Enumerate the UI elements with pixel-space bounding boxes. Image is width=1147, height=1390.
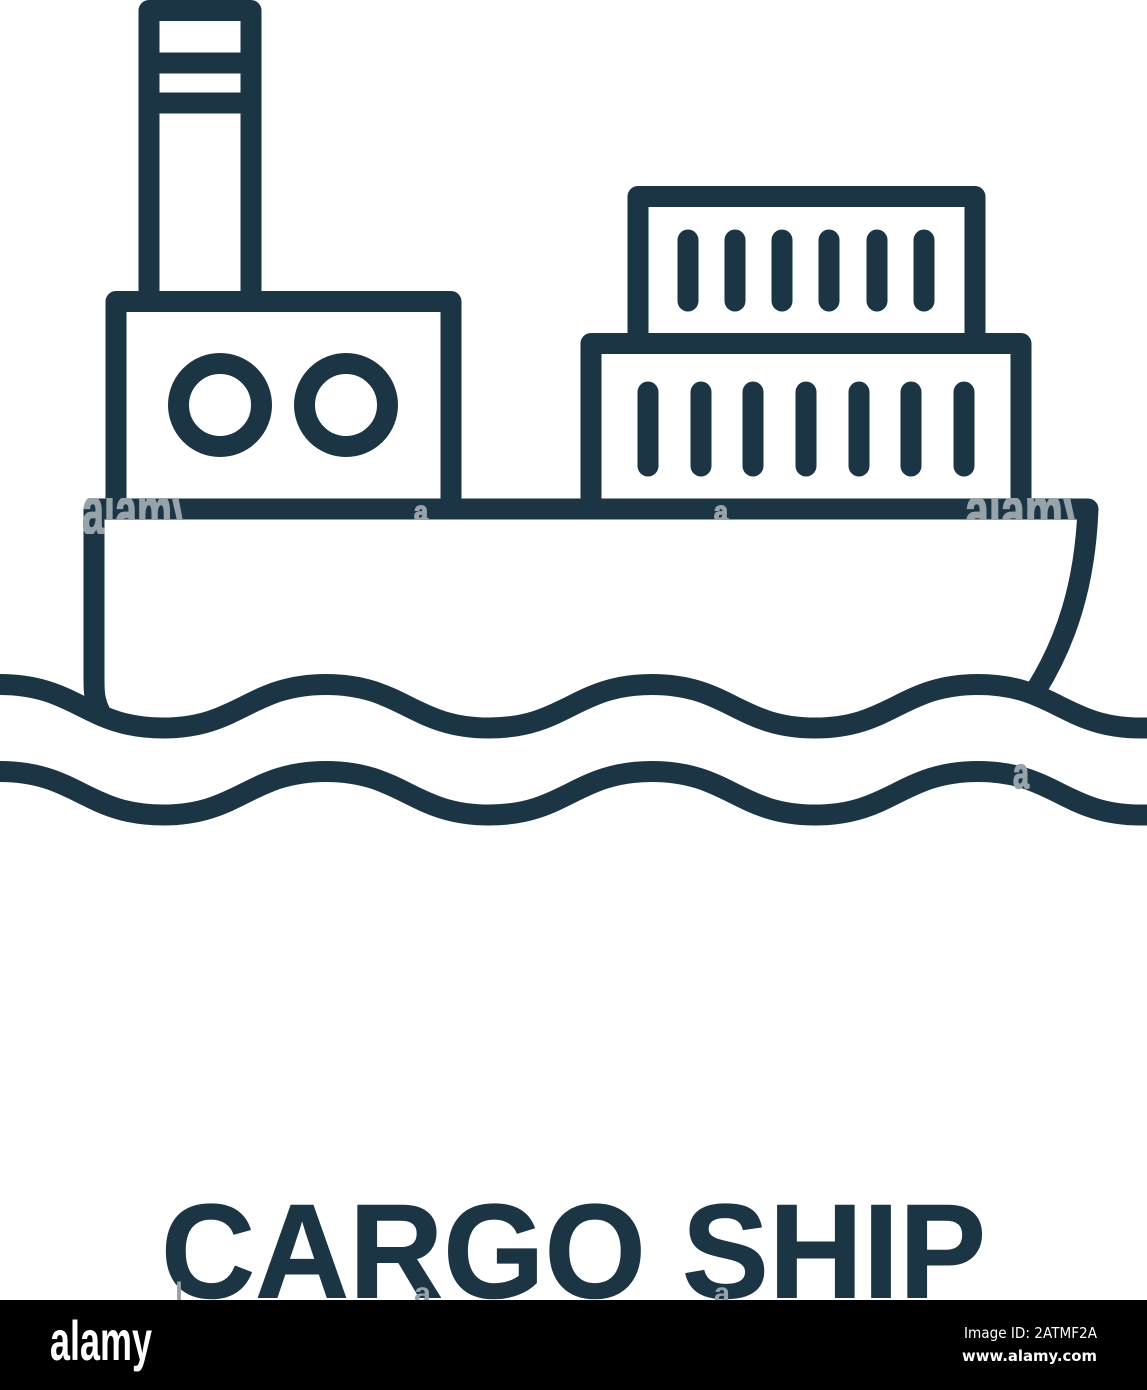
title watermark fragments: [177, 1282, 728, 1300]
image id: Image ID: 2ATMF2A: [964, 1324, 1098, 1342]
ship and waves icon: [0, 10, 1147, 815]
footer bar: [0, 1300, 1147, 1390]
icon: cabin with portholes: [116, 302, 451, 509]
title: CARGO SHIP: [161, 1178, 986, 1326]
watermark fragments: a: [1013, 749, 1029, 798]
icon: upper container: [638, 196, 975, 343]
watermark fragments: alamy: [82, 473, 194, 549]
title watermark fragments: a: [414, 1277, 431, 1310]
icon: funnel chimney: [149, 10, 251, 301]
watermark fragments: a: [414, 496, 429, 528]
title watermark fragments: a: [714, 1277, 730, 1310]
logo wordmark: alamy: [50, 1309, 152, 1372]
icon: upper wave: [0, 684, 1147, 728]
icon: lower container: [591, 344, 1021, 509]
icon: lower wave: [0, 772, 1147, 815]
title watermark fragments: l: [175, 1277, 183, 1310]
watermark fragments: a: [714, 496, 729, 528]
title: [166, 1203, 982, 1300]
icon: ship hull: [94, 509, 1088, 712]
website: www.alamy.com: [962, 1347, 1097, 1365]
watermark fragments: [83, 498, 1075, 790]
